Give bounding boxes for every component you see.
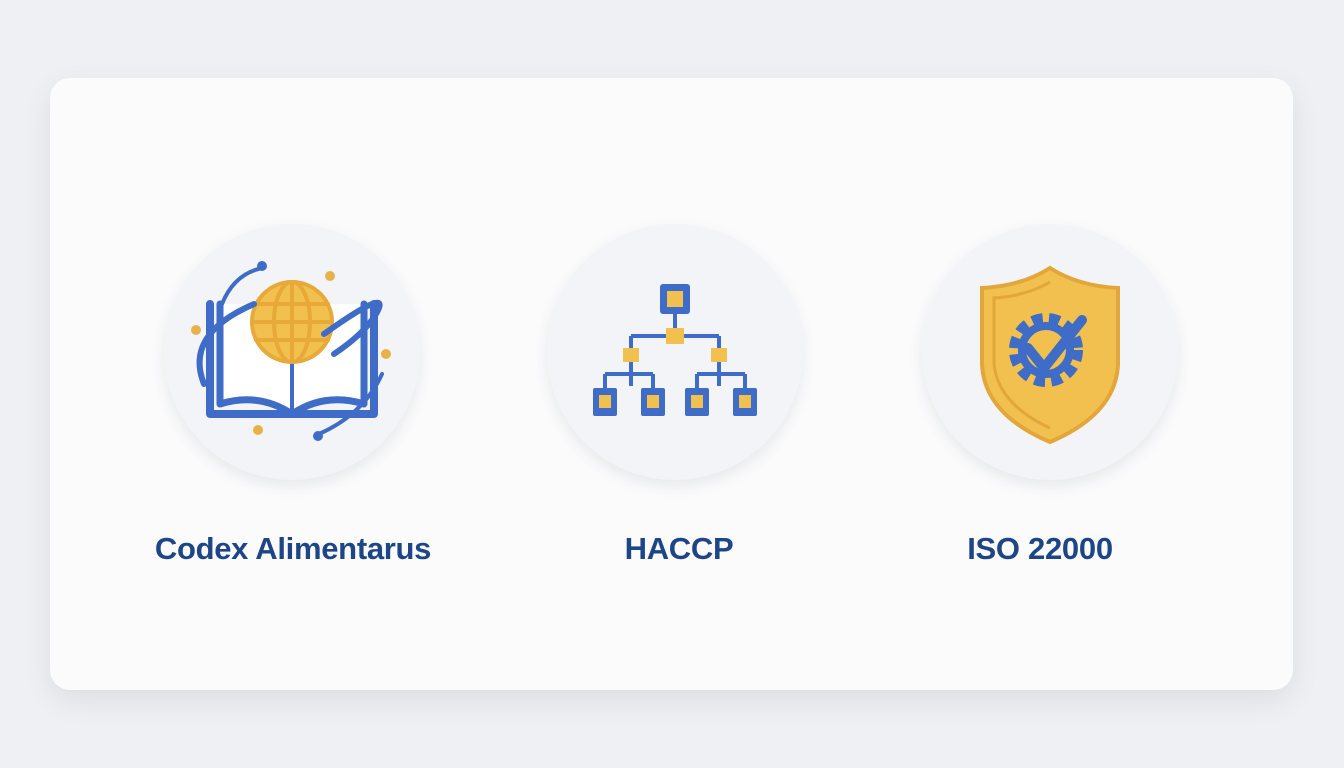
icon: book with globe — [200, 268, 382, 434]
icon circle: codex — [164, 224, 420, 480]
label: haccp: HACCP — [625, 531, 733, 566]
icon: shield with gear check — [982, 268, 1118, 442]
icon circle: iso — [922, 224, 1178, 480]
icon: hierarchy — [593, 284, 757, 416]
label: codex: Codex Alimentarus — [155, 531, 431, 566]
icon circle: haccp — [547, 224, 803, 480]
label: iso: ISO 22000 — [967, 531, 1113, 566]
card panel — [50, 78, 1293, 690]
